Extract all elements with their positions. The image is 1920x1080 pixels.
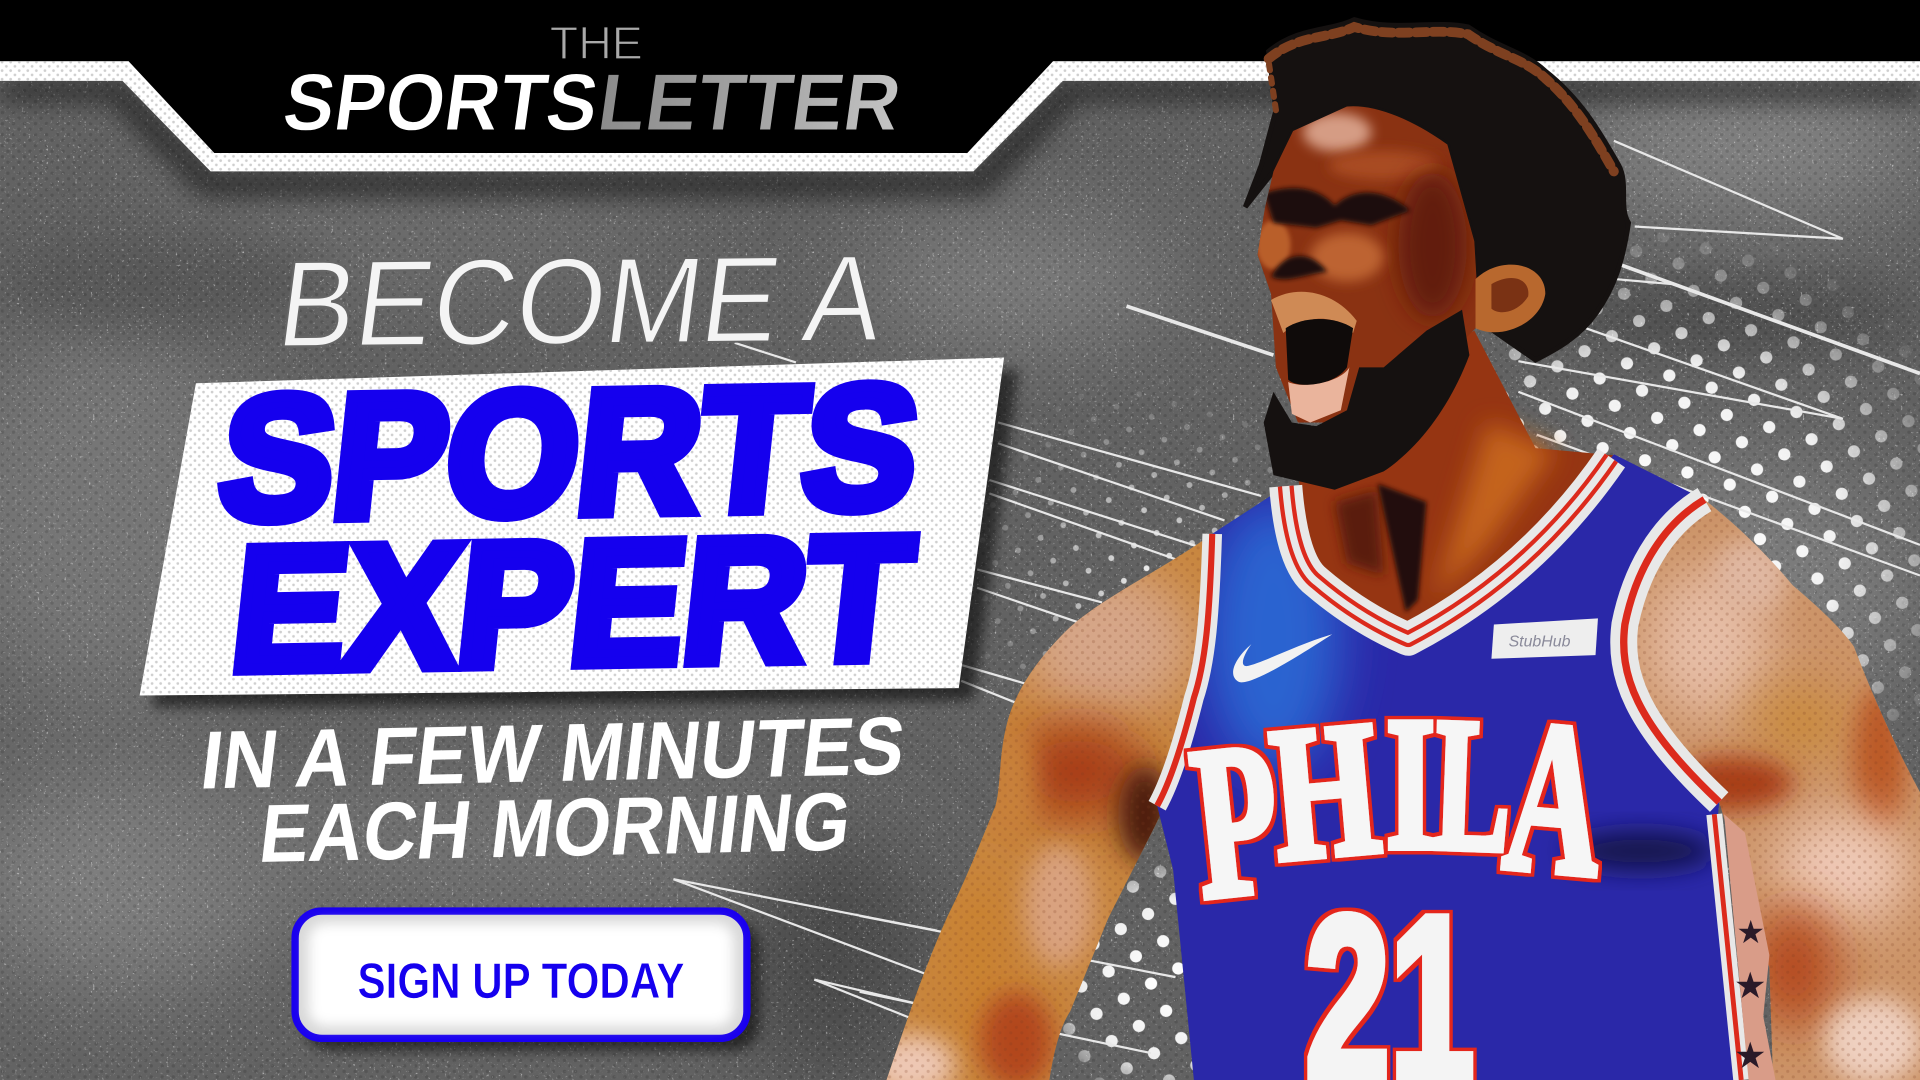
header white border bbox=[0, 61, 1920, 171]
jersey wordmark PHILA: A bbox=[1497, 675, 1613, 923]
header black shape bbox=[0, 0, 1920, 153]
button label: SIGN UP TODAY bbox=[358, 953, 684, 1009]
subheading: IN A FEW MINUTES bbox=[196, 700, 910, 807]
nike swoosh bbox=[1233, 634, 1332, 682]
heading: become a: BECOME A bbox=[271, 231, 891, 373]
logo: The Sports Letter bbox=[278, 17, 907, 148]
neck and chest bbox=[1298, 331, 1616, 643]
jersey wordmark PHILA: P bbox=[1182, 697, 1290, 945]
open mouth bbox=[1271, 292, 1357, 422]
right arm bbox=[1616, 490, 1920, 1080]
brows and eyes bbox=[1264, 188, 1411, 228]
jersey arm trim bbox=[1157, 500, 1741, 1080]
logo: The Sports Letter: THE bbox=[550, 17, 643, 69]
basketball player bbox=[857, 20, 1920, 1080]
jersey wordmark PHILA: H bbox=[1264, 682, 1387, 901]
logo: The Sports Letter: LETTER bbox=[593, 57, 907, 148]
ear bbox=[1476, 265, 1545, 332]
beard bbox=[1264, 310, 1469, 490]
jersey side panel with stars: ★ bbox=[1734, 965, 1767, 1006]
jersey wordmark PHILA: L bbox=[1431, 679, 1514, 892]
sponsor patch bbox=[1491, 618, 1598, 659]
face bbox=[1258, 106, 1476, 422]
logo: The Sports Letter: SPORTS bbox=[278, 57, 604, 148]
sign up button bbox=[295, 911, 759, 1051]
subheading: EACH MORNING bbox=[255, 776, 856, 880]
headline: sports: SPORTS bbox=[212, 349, 927, 557]
jersey side panel with stars bbox=[1724, 814, 1776, 1080]
header banner bbox=[0, 0, 1920, 196]
sponsor patch: StubHub bbox=[1509, 634, 1571, 651]
hair bbox=[1245, 20, 1629, 360]
jersey side panel with stars: ★ bbox=[1736, 914, 1765, 950]
left arm bbox=[886, 540, 1202, 1080]
subheading bbox=[196, 700, 910, 880]
jersey collar trim bbox=[1286, 458, 1611, 639]
halftone dots behind player bbox=[980, 233, 1920, 1080]
headline: expert: EXPERT bbox=[224, 500, 920, 708]
jersey wordmark PHILA bbox=[1182, 675, 1613, 945]
headline panel bbox=[140, 349, 1019, 708]
jersey side panel with stars: ★ bbox=[1734, 1035, 1767, 1076]
nose shadow bbox=[1271, 256, 1327, 279]
speed lines bbox=[673, 141, 1920, 1053]
jersey bbox=[1151, 441, 1751, 1080]
jersey wordmark PHILA: I bbox=[1386, 679, 1435, 889]
